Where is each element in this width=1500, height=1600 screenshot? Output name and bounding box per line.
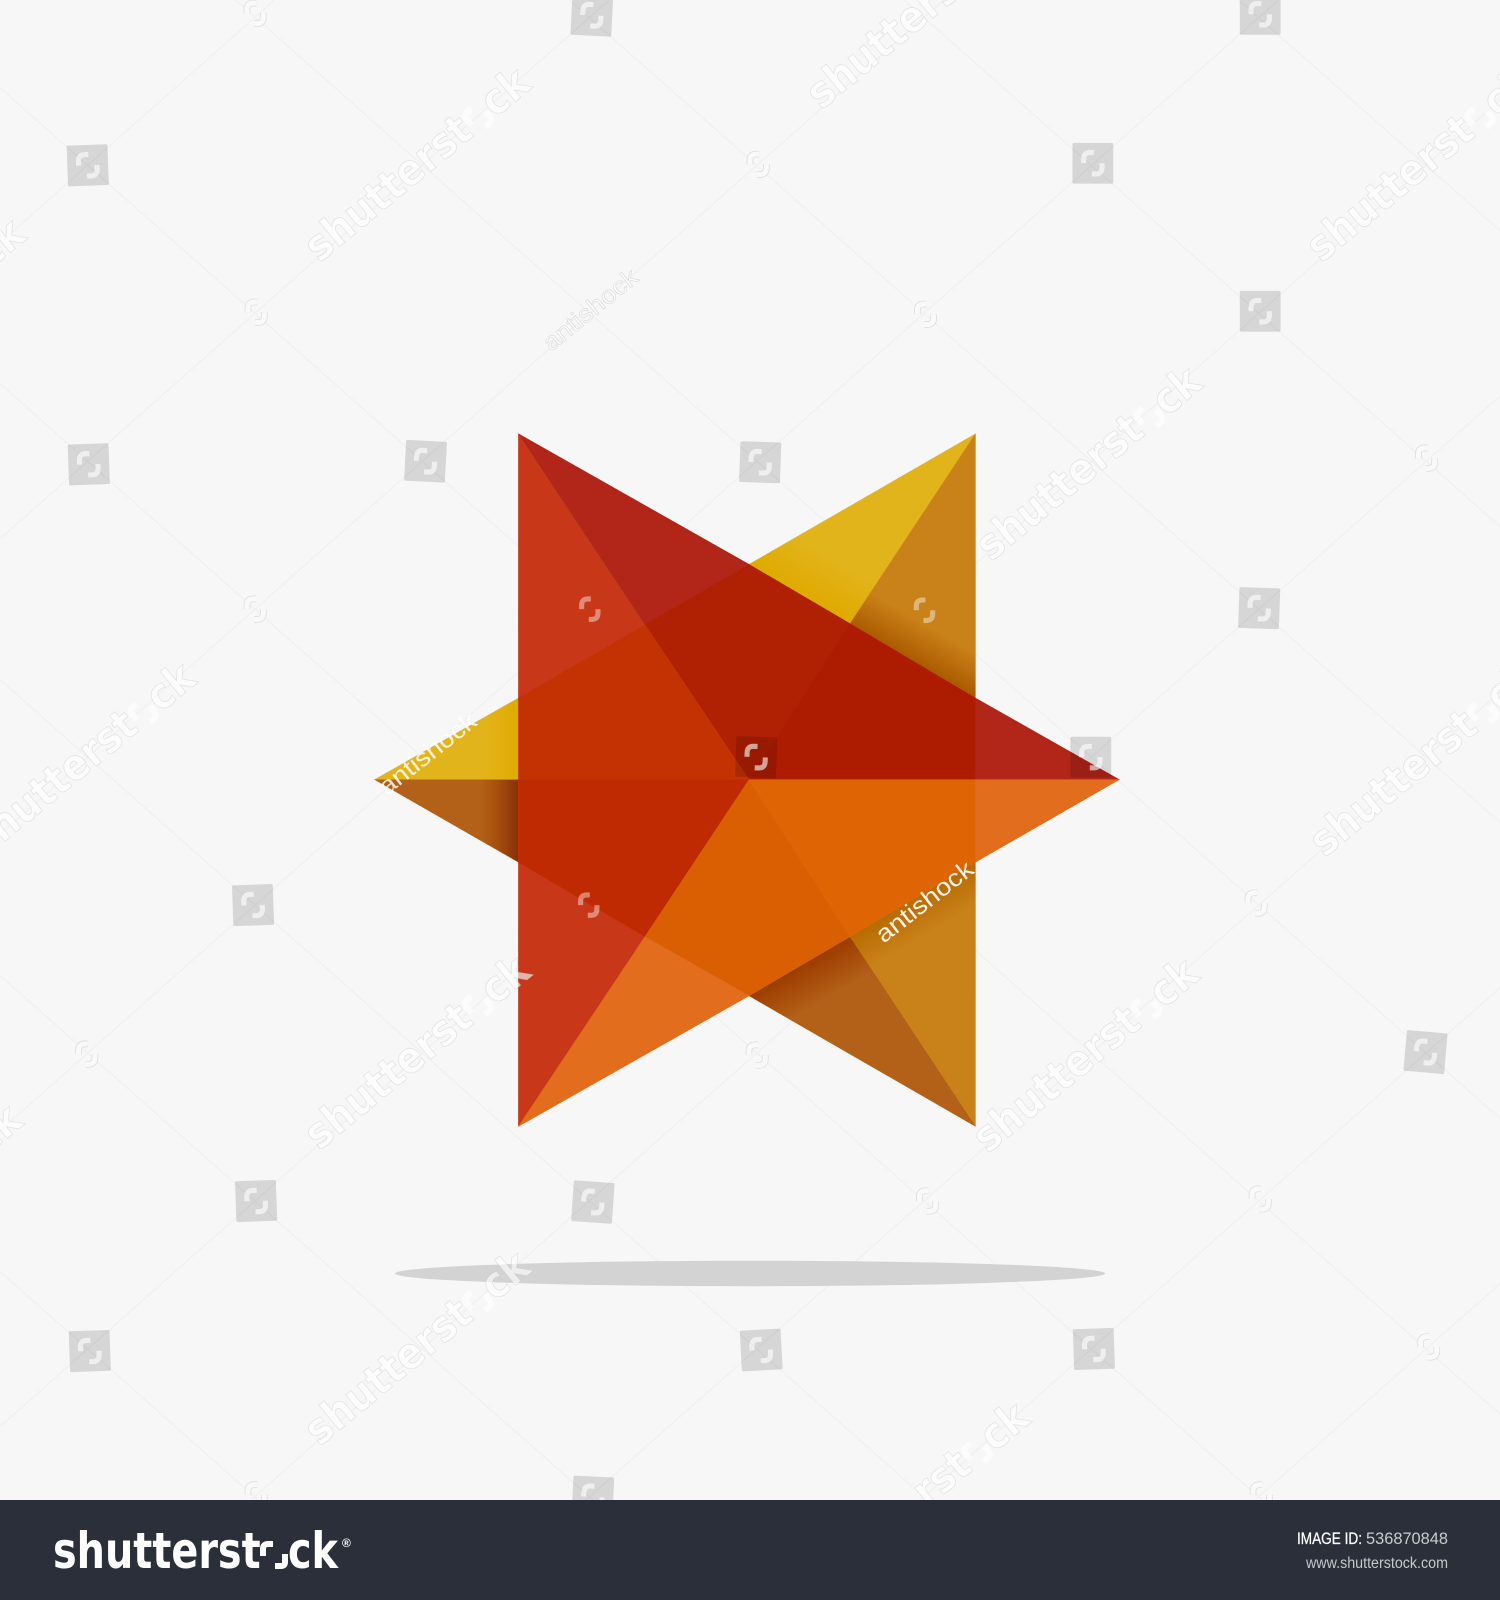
facet: top right yellow (749, 434, 976, 623)
six-point star (374, 434, 1119, 1127)
facet: top centre crimson (645, 564, 850, 780)
watermark wordmarks: shutterstock (966, 355, 1212, 571)
facet: left tip yellow (374, 698, 518, 780)
facet: upper left red (518, 434, 645, 698)
facet: bottom centre orange (645, 780, 850, 996)
facet: left centre upper (518, 624, 749, 780)
contributor watermark: lower right: antishock (871, 855, 980, 949)
facet: top dark red (518, 434, 749, 624)
watermark wordmarks: shutterstock (963, 947, 1209, 1163)
image id number: 536870848 (1366, 1530, 1448, 1548)
image id: IMAGE ID: (1297, 1530, 1362, 1548)
facet: right tip orange (976, 780, 1119, 862)
contributor watermark: left tip: antishock (374, 707, 483, 801)
facet: left centre lower (518, 780, 749, 937)
facet: lower right ochre (850, 862, 976, 1127)
facet: top right ochre (850, 434, 976, 698)
facet: right centre crimson (749, 623, 976, 780)
website: www.shutterstock.com (1305, 1555, 1448, 1572)
ground shadow (395, 1261, 1105, 1286)
facet: left tip brown (374, 780, 518, 862)
footer logo: shutterstock (53, 1522, 339, 1580)
watermark wordmarks: shutterstock (295, 1240, 541, 1455)
watermark wordmarks: shutterstock (295, 56, 541, 272)
watermark wordmarks: rstock (902, 1391, 1040, 1517)
facet: bottom orange (518, 937, 749, 1127)
facet: right tip dark red (976, 698, 1119, 780)
facet: lower brown (749, 937, 976, 1127)
facet: right centre orange (749, 780, 976, 937)
footer logo: ® (342, 1536, 351, 1550)
facet: lower left red (518, 862, 645, 1127)
contributor watermark: top: antishock (538, 263, 644, 357)
watermark wordmarks: shutterstock (295, 944, 541, 1160)
footer bar (0, 1500, 1500, 1600)
